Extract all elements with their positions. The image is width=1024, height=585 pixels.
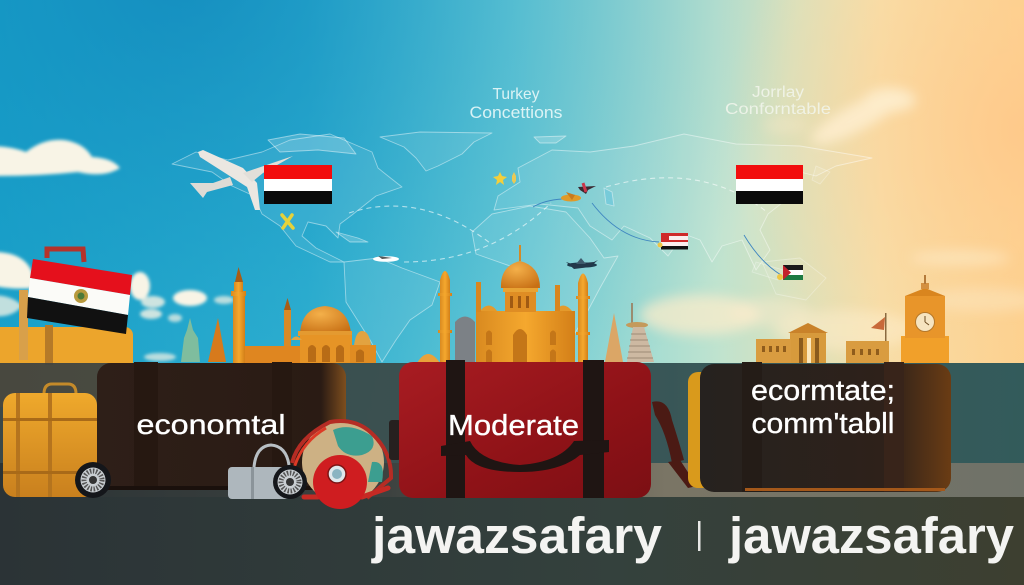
dark suitcase: comfortable (688, 362, 951, 492)
map: arctic islands (268, 134, 356, 154)
main dome (501, 261, 540, 288)
map label: Conforntable: Conforntable (725, 101, 831, 118)
map: Greenland (380, 132, 492, 171)
yellow suitcase behind flag (0, 249, 133, 407)
clock tower (901, 336, 949, 363)
map: Africa (472, 206, 618, 358)
brown suitcase: economical (97, 362, 346, 490)
dark translucent band (0, 363, 1024, 468)
map: Caribbean (336, 232, 368, 242)
map: Eurasia (494, 134, 872, 270)
label: Moderate: Moderate (448, 410, 579, 442)
map: North America (172, 134, 402, 262)
small flag: black white green (777, 265, 803, 280)
small gold dome (417, 354, 440, 363)
tall minaret (231, 267, 246, 364)
palace body (476, 311, 575, 363)
luggage wheel: left (75, 462, 111, 498)
map: Caspian sea (604, 188, 614, 206)
map: Japan (812, 166, 830, 184)
egyptian flag on suitcase (27, 259, 132, 334)
landmark: left mosque skyline (181, 267, 376, 364)
gray skyscraper (455, 316, 475, 362)
flag: left map flag (264, 165, 332, 204)
red suitcase: moderate (389, 360, 651, 498)
airplane icon (190, 150, 293, 210)
map: Svalbard (534, 136, 566, 143)
classical building (788, 323, 828, 333)
map: South America (344, 258, 440, 362)
floor (0, 463, 1024, 585)
palace arches (486, 329, 556, 363)
red ball with lens (304, 455, 388, 509)
luggage wheel: center (273, 465, 307, 499)
landmark: right buildings (756, 275, 949, 363)
map label: Concettions: Concettions (470, 103, 562, 122)
label: comm'tabll: comm'tabll (752, 408, 894, 440)
clouds (0, 81, 1024, 361)
left minaret (438, 271, 452, 363)
world map (172, 132, 872, 362)
globe with red headset (292, 421, 391, 503)
mosque dome and hall (300, 306, 351, 333)
right minaret (576, 274, 590, 363)
flag: right map flag (736, 165, 803, 204)
pointed obelisk (208, 318, 226, 362)
map label: Jorrlay: Jorrlay (752, 84, 804, 101)
brand text: right: jawazsafary (728, 507, 1015, 564)
map: Australia and islands (762, 258, 826, 300)
map: Indonesia (752, 262, 790, 280)
landmark: central palace (417, 245, 590, 363)
yellow suitcase: small front (3, 384, 97, 497)
map marker: gold stars and small planes (282, 172, 598, 269)
landmark: cone and striped tower (605, 303, 654, 362)
brand divider (698, 521, 700, 551)
route lines (349, 178, 781, 275)
small minaret (284, 298, 291, 349)
second building with flag (846, 341, 889, 363)
label: economtal: economtal (136, 409, 286, 440)
statue of liberty (181, 318, 200, 362)
connector strap (652, 401, 697, 488)
label: ecormtate;: ecormtate; (751, 375, 895, 407)
small flag: striped red (658, 233, 688, 250)
brand text: left: jawazsafary (371, 507, 663, 564)
map label: Turkey: Turkey (492, 86, 540, 103)
gray travel bag (228, 445, 290, 499)
